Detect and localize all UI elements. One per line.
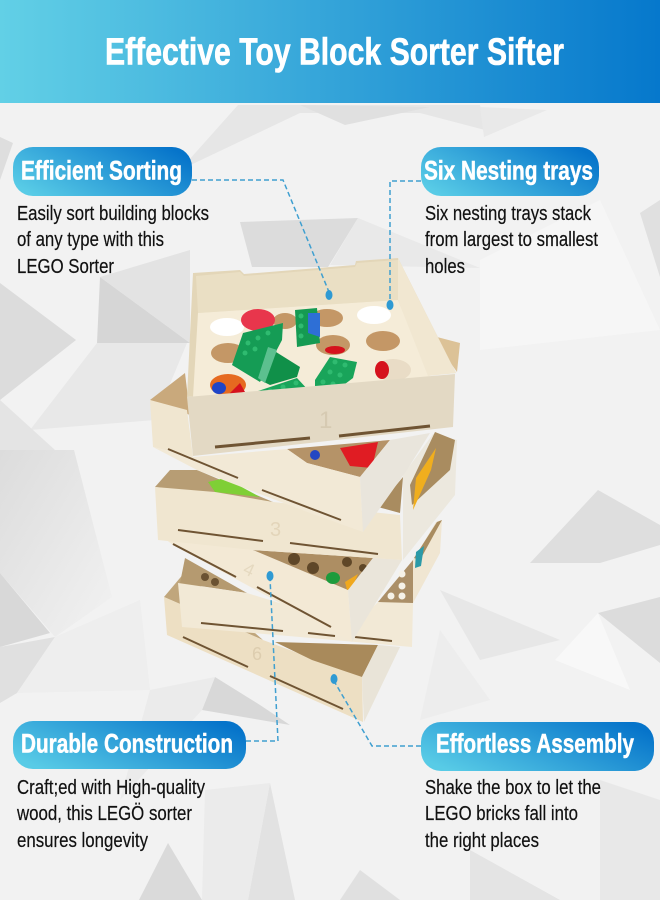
- connector: Durable Construction: [246, 571, 278, 741]
- panel: Durable Construction: [13, 721, 246, 852]
- product photo: stacked wooden trays: [150, 258, 460, 722]
- connector: Six Nesting trays: [386, 181, 421, 310]
- pill heading: [13, 721, 246, 769]
- pill heading: [421, 722, 654, 771]
- tray 1: [187, 258, 456, 456]
- body text: the right places: [425, 830, 539, 852]
- connector: Efficient Sorting: [192, 180, 332, 300]
- body text: [425, 777, 601, 852]
- body text: Craft;ed with High-quality: [17, 777, 205, 799]
- panel: Six Nesting trays: [421, 147, 599, 278]
- body text: of any type with this: [17, 229, 164, 251]
- body text: Shake the box to let the: [425, 777, 601, 799]
- body text: ensures longevity: [17, 830, 148, 852]
- body text: Easily sort building blocks: [17, 203, 209, 225]
- body text: [16, 777, 205, 852]
- body text: LEGO bricks fall into: [425, 803, 578, 825]
- pill heading: Six Nesting trays: [424, 156, 593, 186]
- pill heading: Durable Construction: [21, 728, 233, 758]
- tray 4: [160, 535, 402, 642]
- tray 3: 3: [270, 519, 281, 541]
- connector: Effortless Assembly: [330, 674, 421, 746]
- pill heading: [421, 147, 599, 196]
- tray 1: 1: [319, 407, 332, 434]
- tray 4: 4: [240, 558, 258, 581]
- body text: [17, 203, 209, 278]
- tray 1 holes: [210, 306, 411, 396]
- body text: from largest to smallest: [425, 229, 598, 251]
- body text: Six nesting trays stack: [425, 203, 592, 225]
- pill heading: [13, 147, 192, 196]
- tray 6: 6: [252, 644, 262, 664]
- tray 2: [150, 337, 460, 532]
- panel: Efficient Sorting: [13, 147, 209, 278]
- body text: [425, 203, 598, 278]
- body text: LEGO Sorter: [17, 256, 114, 278]
- tray 6: [164, 572, 400, 722]
- pill heading: Efficient Sorting: [21, 156, 182, 186]
- body text: holes: [425, 256, 465, 278]
- tray 3: [155, 432, 457, 560]
- LEGO bricks: [232, 308, 357, 397]
- tray 5: [178, 520, 442, 647]
- body text: wood, this LEGÖ sorter: [16, 803, 192, 825]
- header banner: [0, 0, 660, 103]
- panel: Effortless Assembly: [421, 722, 654, 852]
